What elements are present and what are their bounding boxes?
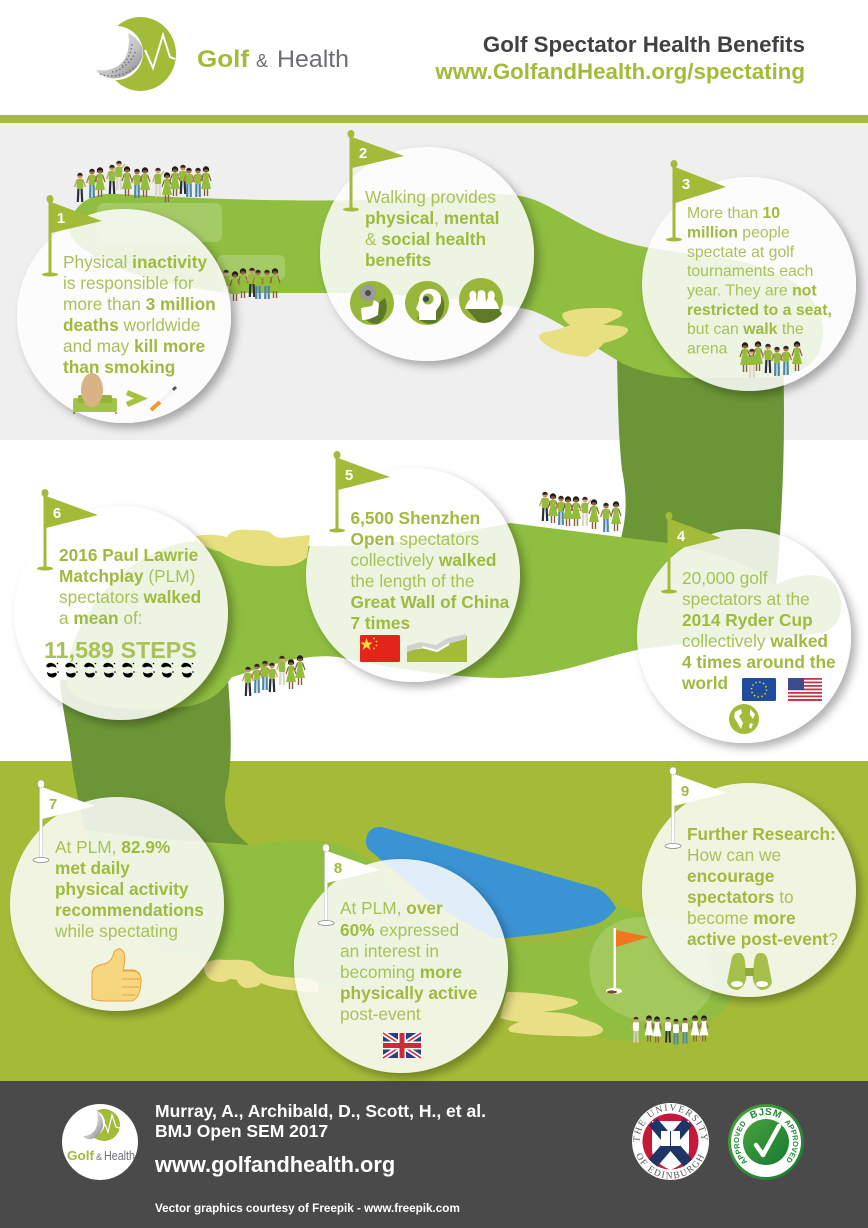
text block: active post-event?: [687, 929, 838, 949]
text block: but can walk the: [687, 321, 804, 338]
text block: spectators to: [687, 887, 794, 907]
header divider bar: [0, 115, 868, 123]
text block: 2014 Ryder Cup: [682, 610, 813, 630]
text block: At PLM, 82.9%: [55, 837, 170, 857]
logo: Golf & Health: Health: [277, 46, 349, 73]
panel: step 8: [294, 844, 508, 1073]
text block: 7 times: [350, 613, 410, 633]
text block: & social health: [365, 229, 486, 249]
text block: 20,000 golf: [682, 568, 768, 588]
background: dark footer: [0, 1081, 868, 1228]
flag 9: [665, 767, 727, 848]
flag 5: [329, 451, 390, 532]
course: left lower bunker: [204, 960, 319, 992]
crowd: near putting green: [631, 1015, 708, 1045]
text block: recommendations: [55, 900, 204, 920]
background: white header: [0, 0, 868, 115]
citation: BMJ Open SEM 2017: [155, 1121, 328, 1141]
text block: more than 3 million: [63, 294, 216, 314]
text block: physical, mental: [365, 208, 499, 228]
text block: spectators at the: [682, 589, 810, 609]
text block: tournaments each: [687, 263, 813, 280]
footer logo: [62, 1104, 138, 1180]
icon: hole flag: [606, 928, 649, 994]
text block: collectively walked: [350, 550, 496, 570]
text block: year. They are not: [687, 282, 817, 300]
text block: and may kill more: [63, 336, 205, 356]
logo: BJSM approved: APPROVED: [734, 1121, 748, 1164]
text block: post-event: [340, 1004, 421, 1024]
logo: BJSM approved: APPROVED: [784, 1120, 798, 1162]
flag 1: 1: [57, 210, 65, 227]
text block: deaths worldwide: [63, 315, 200, 335]
flag 8: [318, 844, 380, 926]
text block: an interest in: [340, 941, 439, 961]
icon: US flag: [788, 678, 822, 701]
text block: arena: [687, 340, 728, 358]
icon: Great Wall: [407, 634, 467, 662]
logo: Golf & Health: [89, 17, 349, 91]
icon: binoculars: [727, 953, 772, 990]
flag 3: 3: [682, 176, 690, 193]
logo: Golf & Health: &: [256, 51, 268, 71]
icon: EU flag: [742, 678, 776, 701]
title url: www.GolfandHealth.org/spectating: [434, 59, 805, 84]
course: dark fairway trunk upper: [617, 358, 784, 600]
flag 3: [666, 160, 726, 242]
text block: is responsible for: [63, 273, 194, 293]
text block: Physical inactivity: [63, 252, 207, 272]
flag 1: [42, 195, 102, 276]
icon: sofa greater than cigarette: [73, 373, 176, 414]
text block: world: [681, 673, 728, 693]
logo: University of Edinburgh: OF EDINBURGH: [636, 1153, 704, 1178]
flag 6: [37, 489, 98, 570]
stat: steps: 11,589 STEPS: [44, 637, 197, 663]
text block: than smoking: [63, 357, 175, 377]
crowd: lower-left of top fairway: [221, 268, 280, 301]
icon: China flag: [360, 635, 400, 662]
text block: Further Research:: [687, 824, 836, 844]
credit: Vector graphics courtesy of Freepik - www.freepik.com: [155, 1202, 460, 1215]
panel: step 4: [637, 512, 851, 743]
flag 4: 4: [677, 528, 686, 545]
flag 6: 6: [53, 505, 61, 522]
text block: More than 10: [687, 205, 780, 222]
text block: restricted to a seat,: [687, 302, 832, 319]
citation: Murray, A., Archibald, D., Scott, H., et al.: [155, 1101, 486, 1121]
crowd: top fairway: [75, 161, 211, 202]
logo: BJSM approved: BJSM: [750, 1108, 782, 1118]
background: white section: [0, 440, 868, 761]
text block: spectators walked: [59, 587, 201, 607]
icon: physical: [350, 281, 394, 325]
panel: step 1: [17, 195, 231, 423]
logo: University of Edinburgh: THE UNIVERSITY: [633, 1104, 708, 1142]
icon: thumbs up: [92, 949, 141, 1001]
text block: At PLM, over: [340, 898, 443, 918]
background: green section: [0, 761, 868, 1081]
text block: become more: [687, 908, 796, 928]
text block: while spectating: [54, 921, 178, 941]
panel: step 6: [14, 489, 228, 720]
course: right lower bunker: [500, 992, 603, 1036]
course: putting green: [589, 917, 714, 1023]
text block: collectively walked: [682, 631, 828, 651]
footer logo: Health: [104, 1149, 135, 1163]
panel: step 5: [306, 451, 520, 682]
text block: Open spectators: [350, 529, 479, 549]
text block: Great Wall of China: [350, 592, 510, 612]
icon: social: [459, 278, 503, 323]
title: Golf Spectator Health Benefits: [483, 32, 805, 57]
course: rim under lake: [490, 915, 612, 943]
text block: million people: [687, 224, 790, 242]
crowd: near step 6: [243, 655, 305, 696]
text block: becoming more: [340, 962, 462, 982]
text block: met daily: [55, 858, 130, 878]
flag 5: 5: [345, 467, 353, 484]
footer logo: Golf: [67, 1149, 95, 1163]
text block: benefits: [365, 250, 431, 270]
text block: Walking provides: [365, 187, 496, 207]
icon: globe: [729, 704, 759, 734]
logo: BJSM approved: [728, 1104, 804, 1180]
text block: 2016 Paul Lawrie: [59, 545, 199, 565]
text block: 4 times around the: [682, 652, 836, 672]
text block: 6,500 Shenzhen: [350, 508, 480, 528]
crowd: near step 4: [540, 492, 621, 532]
text block: encourage: [687, 866, 775, 886]
course: top bunker: [539, 308, 628, 357]
panel: step 7: [10, 780, 224, 1011]
flag 2: 2: [359, 145, 367, 162]
flag 7: 7: [49, 796, 57, 813]
flag 4: [661, 512, 721, 594]
flag 9: 9: [681, 783, 689, 800]
course: lower fairway: [85, 830, 740, 1041]
text block: spectate at golf: [687, 244, 795, 261]
panel: step 9: [642, 767, 856, 997]
flag 7: [33, 780, 95, 862]
course: middle bunker: [194, 530, 310, 566]
icon: footsteps row: [46, 663, 194, 678]
text block: Matchplay (PLM): [59, 566, 195, 586]
course: dark fairway trunk lower: [60, 680, 249, 845]
footer logo: &: [96, 1152, 102, 1162]
text block: How can we: [687, 845, 781, 865]
footer url: www.golfandhealth.org: [154, 1152, 395, 1177]
icon: mental: [405, 281, 449, 325]
text block: a mean of:: [59, 608, 143, 628]
crowd: in bubble: [740, 341, 802, 378]
text block: 60% expressed: [340, 920, 459, 940]
course: top fairway: [69, 194, 823, 378]
text block: the length of the: [350, 571, 474, 591]
text block: physical activity: [55, 879, 189, 899]
text block: physically active: [340, 983, 478, 1003]
icon: UK flag: [383, 1033, 421, 1058]
course: top fairway highlights: [97, 203, 285, 280]
panel: step 2: [320, 130, 534, 361]
course: middle fairway: [66, 523, 841, 709]
background: grey section: [0, 123, 868, 440]
flag 2: [343, 130, 404, 212]
flag 8: 8: [334, 860, 342, 877]
logo: University of Edinburgh: [632, 1103, 709, 1180]
course: lake: [366, 827, 616, 938]
panel: step 3: [642, 160, 856, 391]
logo: Golf & Health: Golf: [197, 46, 250, 73]
